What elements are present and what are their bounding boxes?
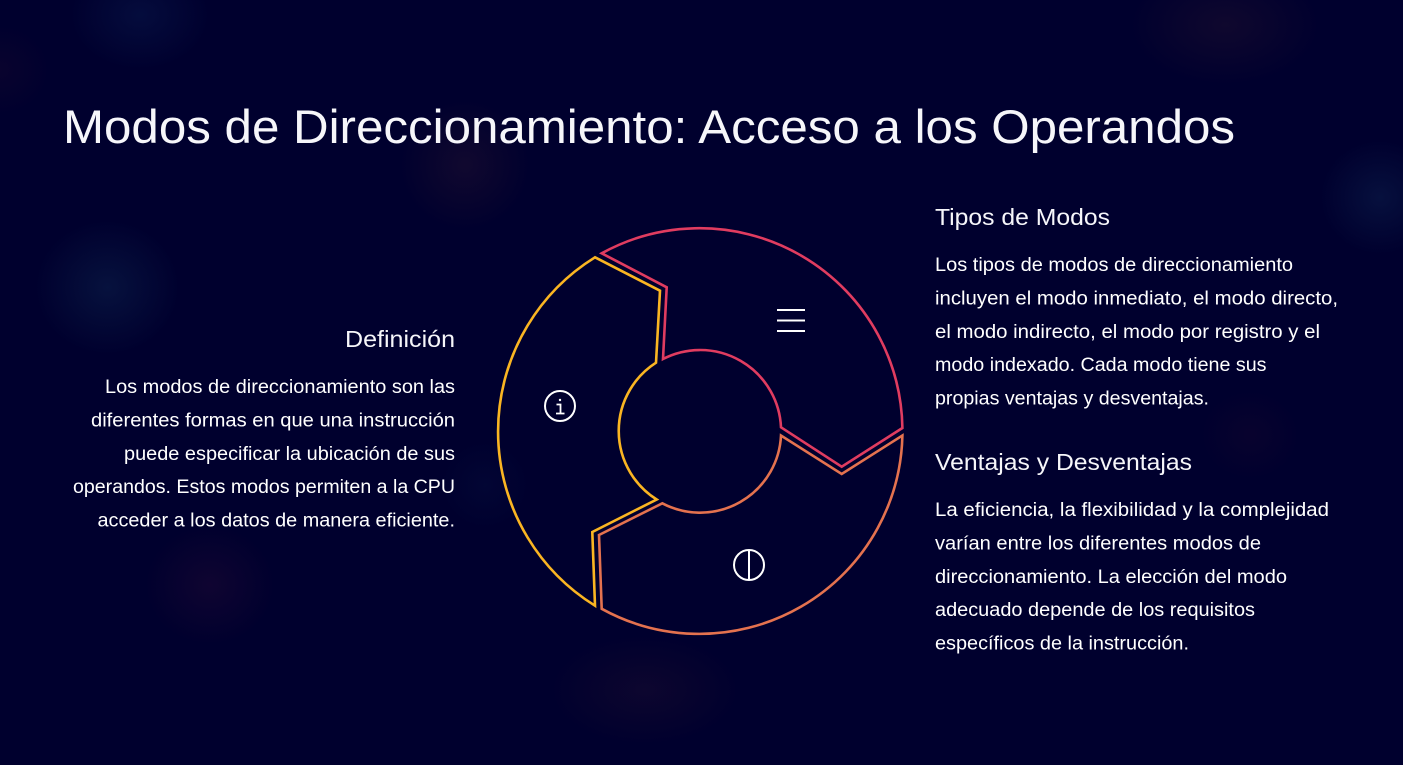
- body: Tipos de Modos: Los tipos de modos de direccionamiento: [935, 255, 1293, 276]
- segment: orange, contrast: [599, 436, 902, 634]
- body: Definición: [73, 377, 455, 532]
- body: Ventajas y Desventajas: específicos de la instrucción.: [935, 634, 1189, 655]
- text block: Tipos de Modos: [935, 204, 1338, 410]
- segment: red, list: [602, 228, 902, 467]
- icon: list: [777, 310, 805, 331]
- heading: Ventajas y Desventajas: Ventajas y Desventajas: [935, 449, 1192, 475]
- body: Definición: operandos. Estos modos permiten a la CPU: [73, 477, 455, 498]
- text block: Definición: [73, 326, 455, 532]
- icon: info: [545, 391, 575, 421]
- icon: split circle: [734, 550, 764, 580]
- title: Modos de Direccionamiento: Acceso a los Operandos: [63, 100, 1235, 153]
- body: Tipos de Modos: propias ventajas y desventajas.: [935, 389, 1209, 410]
- body: Tipos de Modos: incluyen el modo inmediato, el modo directo,: [935, 288, 1338, 309]
- body: Tipos de Modos: el modo indirecto, el modo por registro y el: [935, 322, 1320, 343]
- body: Ventajas y Desventajas: adecuado depende de los requisitos: [935, 600, 1255, 621]
- heading: Definición: Definición: [345, 326, 455, 352]
- body: Tipos de Modos: modo indexado. Cada modo tiene sus: [935, 355, 1266, 376]
- body: Tipos de Modos: [935, 255, 1338, 410]
- body: Definición: puede especificar la ubicación de sus: [124, 444, 455, 465]
- body: Ventajas y Desventajas: [935, 500, 1329, 655]
- body: Ventajas y Desventajas: direccionamiento. La elección del modo: [935, 567, 1287, 588]
- heading: Tipos de Modos: Tipos de Modos: [935, 204, 1110, 230]
- body: Definición: diferentes formas en que una instrucción: [91, 410, 455, 431]
- body: Definición: Los modos de direccionamiento son las: [105, 377, 455, 398]
- segment: yellow, info: [498, 257, 660, 606]
- cycle diagram: [498, 228, 902, 634]
- body: Ventajas y Desventajas: La eficiencia, la flexibilidad y la complejidad: [935, 500, 1329, 521]
- body: Definición: acceder a los datos de manera eficiente.: [98, 511, 455, 532]
- body: Ventajas y Desventajas: varían entre los diferentes modos de: [935, 533, 1261, 554]
- text block: Ventajas y Desventajas: [935, 449, 1329, 655]
